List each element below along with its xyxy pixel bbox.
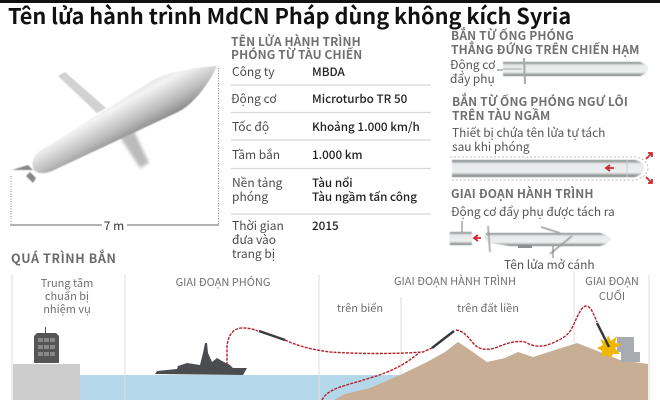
panel: vertical launch: đẩy phụ: [450, 70, 495, 87]
row: engine: Động cơ: [231, 90, 277, 107]
sub label: sea: trên biển: [337, 300, 383, 316]
row: company: Công ty: [232, 63, 275, 80]
missile with wings: [484, 233, 611, 246]
phase label: command: nhiệm vụ: [43, 301, 91, 317]
heading: BẮN TỪ ỐNG PHÓNG: [451, 26, 574, 44]
explosion: [597, 335, 622, 358]
phase label: command: Trung tâm: [41, 275, 93, 291]
row: range: Tầm bắn: [232, 146, 280, 163]
capsule: [452, 160, 644, 177]
missile illustration with 7 m dimension: [10, 66, 219, 234]
missile in launch phase: [259, 331, 285, 340]
phase label: command: [41, 275, 93, 317]
panel: vertical launch: THẲNG ĐỨNG TRÊN CHIẾN HẠM: [451, 41, 640, 58]
red flight paths: [227, 306, 597, 400]
booster label: Động cơ: [450, 56, 495, 73]
spec table: Microturbo TR 50: [312, 90, 408, 107]
dimension: line: [10, 224, 219, 226]
missile in terminal phase: [597, 323, 609, 347]
panel: torpedo tube launch: TRÊN TÀU NGẦM: [452, 107, 550, 124]
red arrows: [606, 153, 652, 183]
top bar: [0, 0, 660, 3]
icon: warship: [155, 343, 247, 375]
wing shadow: [120, 131, 149, 168]
command center ground: [13, 364, 80, 400]
row: platform: Nền tảng: [232, 174, 283, 191]
phase label: terminal: [585, 273, 639, 304]
icon: command building: [34, 327, 59, 363]
spec table: trang bị: [232, 245, 275, 262]
dimension label: 7 m: [104, 217, 124, 234]
table heading: TÊN LỬA HÀNH TRÌNH: [231, 33, 361, 50]
spec table: PHÓNG TỪ TÀU CHIẾN: [231, 46, 362, 63]
panel: torpedo tube launch: sau khi phóng: [452, 138, 530, 155]
phase label: launch: GIAI ĐOẠN PHÓNG: [176, 274, 270, 290]
spec table: Khoảng 1.000 km/h: [312, 118, 420, 135]
heading: GIAI ĐOẠN HÀNH TRÌNH: [451, 185, 594, 202]
spec table: MBDA: [312, 63, 346, 80]
target building: [617, 337, 640, 362]
wing: [58, 72, 106, 113]
row: service date: Thời gian: [232, 217, 284, 234]
booster: [450, 232, 472, 245]
title: Tên lửa hành trình MdCN Pháp dùng không kích Syria: [8, 0, 571, 31]
terrain: [334, 342, 648, 400]
phase dividers: [12, 272, 649, 400]
spec table: Tàu nổi: [312, 174, 353, 191]
spec table: Tàu ngầm tấn công: [312, 188, 417, 205]
spec table: đưa vào: [232, 231, 276, 248]
spec table: phóng: [232, 188, 268, 205]
text: Thiết bị chứa tên lửa tự tách: [452, 124, 605, 141]
spec table: 1.000 km: [312, 146, 363, 163]
red arrow: [474, 235, 481, 241]
spec table: 2015: [312, 217, 339, 234]
launch process diagram: [12, 272, 649, 400]
panel: torpedo tube launch: [450, 92, 652, 183]
sub label: land: trên đất liền: [457, 300, 519, 316]
phase label: cruise: GIAI ĐOẠN HÀNH TRÌNH: [394, 273, 516, 289]
panel: vertical launch: [450, 26, 648, 87]
missile in cruise phase: [432, 331, 454, 348]
missile body: [33, 66, 217, 173]
spec table: [231, 33, 431, 262]
text: Động cơ đẩy phụ được tách ra: [451, 203, 615, 220]
section heading: launch process: QUÁ TRÌNH BẮN: [11, 248, 116, 267]
dimension: dotted guides: [11, 68, 218, 224]
missile tail fins: [12, 165, 36, 183]
phase label: command: chuẩn bị: [45, 288, 89, 304]
label: Tên lửa mở cánh: [504, 256, 595, 273]
panel: cruise phase: [450, 185, 615, 273]
missile with booster: [503, 62, 648, 76]
water: [79, 375, 404, 400]
heading: BẮN TỪ ỐNG PHÓNG NGƯ LÔI: [452, 92, 628, 110]
capsule dashed outline: [450, 157, 648, 180]
phase label: terminal: CUỐI: [599, 288, 625, 304]
phase label: terminal: GIAI ĐOẠN: [585, 273, 639, 289]
row: speed: Tốc độ: [232, 118, 269, 135]
